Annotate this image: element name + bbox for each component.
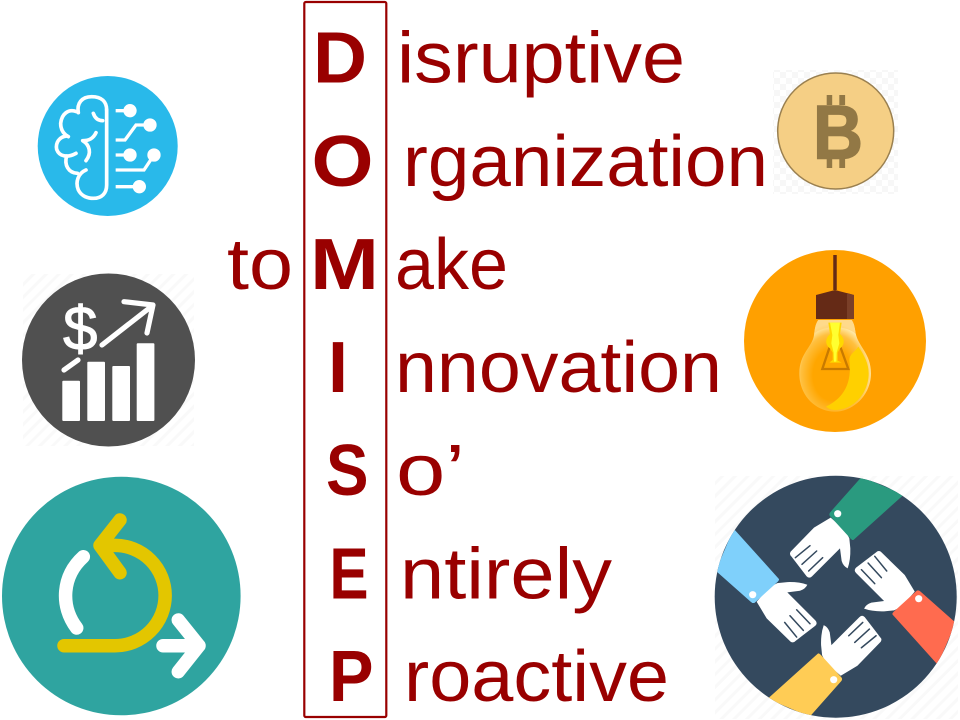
icon: bitcoin coin: B [813, 90, 863, 176]
red frame around the acronym letters [304, 2, 386, 717]
icon: finance growth chart: $ [63, 295, 97, 364]
word: rganization: rganization [403, 122, 768, 202]
acronym letter O: O [312, 122, 374, 202]
icon: bitcoin coin [773, 70, 898, 194]
icon: light bulb [744, 250, 926, 432]
acronym letter D: D [313, 19, 367, 99]
icon: AI brain [38, 76, 178, 216]
acronym letter M: M [310, 225, 379, 305]
word: ake: ake [395, 225, 508, 305]
icon: teamwork hands [715, 476, 958, 719]
icon: agile iteration loop [2, 477, 241, 715]
word: nnovation: nnovation [395, 328, 722, 408]
acronym letter I: I [328, 328, 348, 408]
icon: finance growth chart [22, 274, 195, 446]
word: to: to [227, 225, 293, 305]
word: roactive: roactive [404, 637, 669, 717]
acronym letter P: P [329, 637, 374, 717]
word: ntirely: ntirely [400, 534, 612, 614]
word: isruptive: isruptive [397, 19, 685, 99]
word: o': o’ [396, 431, 465, 511]
acronym letter S: S [326, 431, 368, 511]
acronym letter E: E [330, 534, 368, 614]
